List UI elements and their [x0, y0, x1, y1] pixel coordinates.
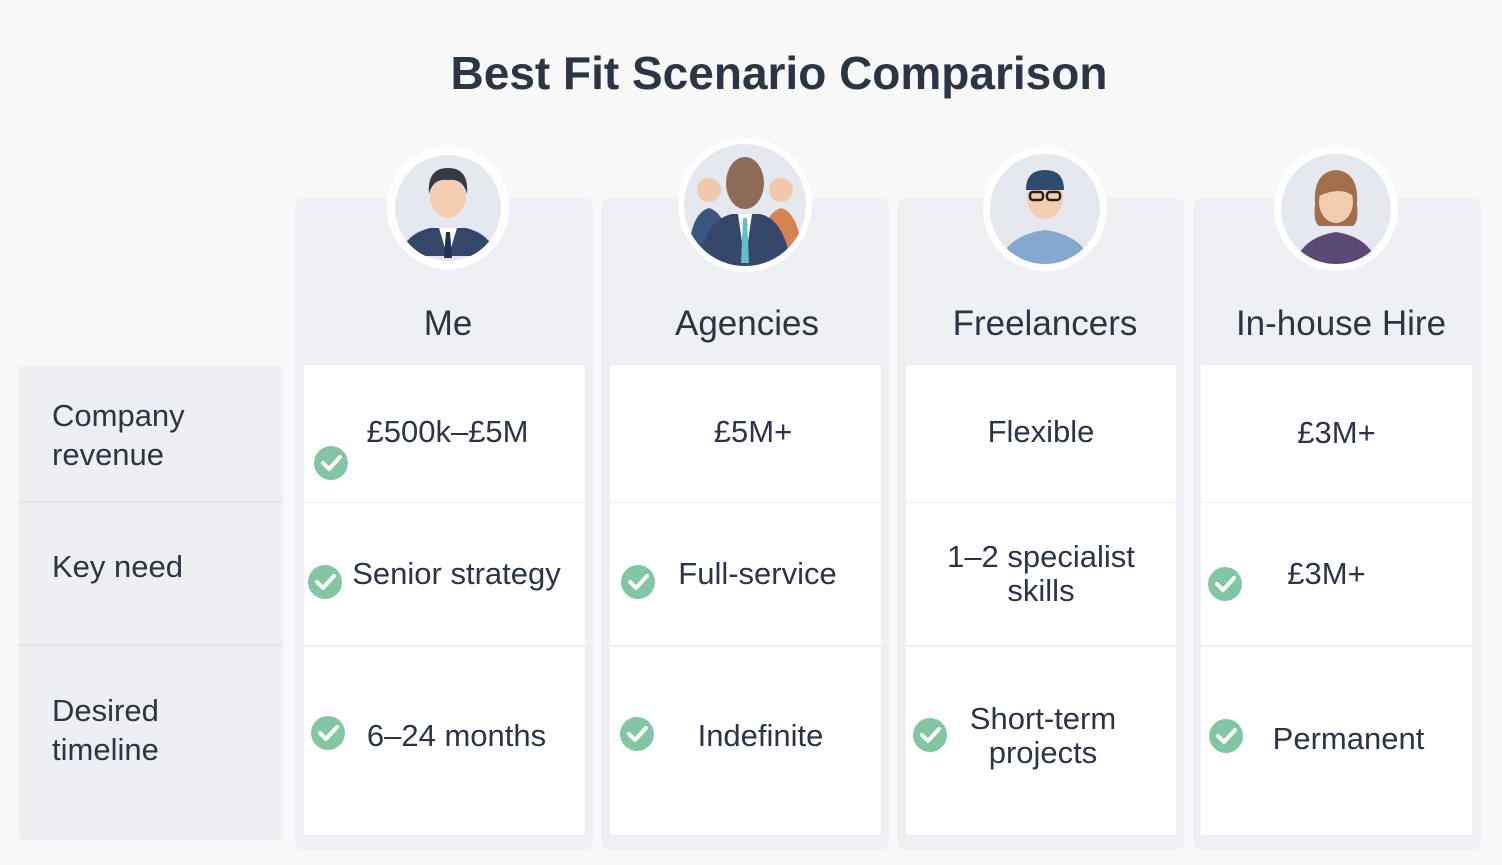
cell: Flexible: [988, 414, 1094, 448]
cell: £500k–£5M: [366, 414, 528, 448]
cell: [906, 365, 1176, 502]
cell: Senior strategy: [352, 556, 561, 591]
icon: check: [314, 446, 348, 480]
cell: 1–2 specialist: [947, 539, 1135, 574]
cell: [906, 647, 1176, 835]
heading: Freelancers: Freelancers: [953, 304, 1137, 343]
cell: Short-term: [970, 701, 1116, 736]
cell: Indefinite: [698, 718, 823, 753]
panel: Freelancers: [898, 198, 1184, 850]
panel: row labels: [19, 366, 283, 840]
icon: check: [620, 717, 654, 751]
cell: £5M+: [714, 414, 792, 448]
cell: [1201, 365, 1472, 502]
label: desired timeline: Desired: [52, 693, 159, 728]
label: desired timeline: timeline: [52, 732, 159, 767]
cell: [610, 365, 881, 502]
icon: avatar Me: [387, 155, 509, 269]
icon: check: [308, 565, 342, 599]
cell: [906, 503, 1176, 645]
cell: £3M+: [1297, 414, 1376, 450]
cell: [304, 503, 585, 645]
label: company revenue: Company: [52, 398, 185, 433]
label: company revenue: revenue: [52, 437, 164, 472]
icon: check: [913, 718, 947, 752]
cell: £3M+: [1287, 556, 1366, 591]
icon: check: [1209, 719, 1243, 753]
icon: avatar Freelancers: [983, 154, 1107, 271]
label: company revenue: [52, 398, 185, 472]
cell: [1201, 647, 1472, 835]
label: key need: Key need: [52, 549, 183, 584]
cell: Full-service: [678, 556, 837, 591]
cell: [1201, 503, 1472, 645]
cell: [610, 503, 881, 645]
cell: 6–24 months: [367, 718, 546, 753]
heading: Me: Me: [424, 304, 472, 343]
cell: [610, 647, 881, 835]
panel: Agencies: [602, 198, 889, 850]
icon: check: [311, 716, 345, 750]
icon: avatar Agencies: [678, 144, 812, 272]
icon: avatar In-house: [1274, 154, 1398, 271]
cell: skills: [1007, 573, 1075, 608]
label: desired timeline: [52, 693, 159, 767]
cell: Permanent: [1273, 721, 1424, 756]
icon: check: [1208, 567, 1242, 601]
panel: In-house Hire: [1194, 198, 1481, 850]
cell: [304, 647, 585, 835]
heading: Agencies: Agencies: [675, 304, 819, 343]
title: Best Fit Scenario Comparison: [451, 47, 1107, 99]
cell: [304, 365, 585, 502]
cell: projects: [989, 735, 1097, 770]
icon: check: [621, 565, 655, 599]
heading: In-house Hire: In-house Hire: [1236, 304, 1446, 343]
panel: Me: [295, 198, 593, 850]
